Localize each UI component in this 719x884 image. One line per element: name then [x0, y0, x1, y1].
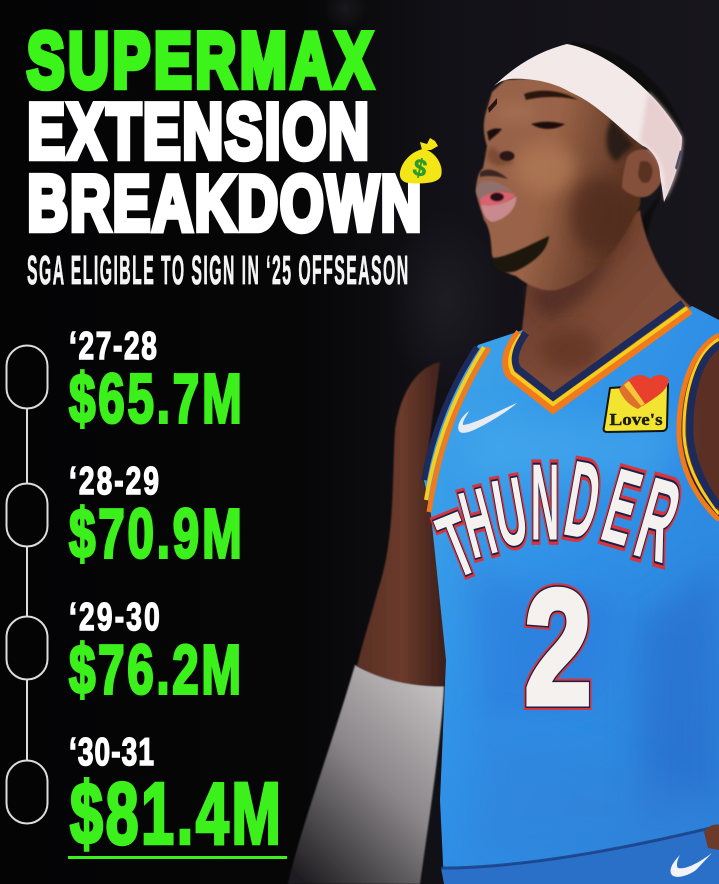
season 2030-31: ‘30-31 — [69, 731, 154, 774]
jersey wordmark THUNDER: E — [592, 446, 652, 569]
waistband and shorts — [441, 826, 719, 884]
left armhole trim — [429, 348, 489, 512]
jersey wordmark THUNDER: R — [624, 452, 693, 587]
jersey wordmark THUNDER: D — [557, 438, 609, 563]
neck — [505, 210, 692, 412]
mouth — [476, 181, 516, 222]
head — [476, 42, 684, 290]
jersey wordmark THUNDER: H — [450, 467, 506, 579]
highlight underline — [68, 856, 287, 859]
face — [476, 78, 645, 290]
jersey wordmark THUNDER: H — [450, 467, 506, 579]
timeline marker 3 — [6, 616, 48, 680]
jersey wordmark THUNDER — [426, 438, 693, 598]
left sleeve — [288, 665, 444, 884]
goatee — [492, 236, 549, 272]
title line: SUPERMAX: SUPERMAX — [27, 17, 373, 104]
jersey wordmark THUNDER: R — [624, 452, 693, 587]
season 2027-28: ‘27-28 — [69, 325, 157, 368]
eyes — [531, 122, 565, 129]
left arm — [357, 362, 448, 686]
nike swoosh on chest — [458, 403, 517, 433]
right armhole trim — [679, 335, 719, 520]
season 2027-28 — [69, 325, 242, 438]
loves patch: Love's — [610, 410, 663, 429]
jersey wordmark THUNDER: N — [531, 442, 559, 563]
season 2029-30 — [69, 596, 241, 709]
title line: BREAKDOWN: BREAKDOWN — [28, 160, 421, 247]
season 2028-29 — [69, 460, 242, 573]
timeline — [6, 346, 48, 824]
eyebrows — [524, 91, 578, 100]
jersey wordmark THUNDER: D — [557, 438, 609, 563]
jersey wordmark THUNDER: N — [531, 442, 559, 563]
title line: EXTENSION: EXTENSION — [28, 88, 369, 175]
jersey number 2: 2 — [524, 557, 592, 739]
jersey wordmark THUNDER: D — [557, 438, 609, 563]
shorts swoosh — [671, 853, 712, 877]
mustache — [480, 170, 508, 179]
jersey wordmark THUNDER: T — [426, 493, 489, 598]
jersey number 2: 2 — [524, 557, 592, 739]
headband — [492, 44, 682, 202]
ear — [622, 149, 664, 197]
jersey wordmark THUNDER: U — [485, 455, 535, 568]
loves patch — [604, 375, 669, 432]
jersey — [424, 303, 719, 884]
hair braid over headband — [570, 42, 684, 140]
jersey wordmark THUNDER: U — [485, 455, 535, 568]
jersey wordmark THUNDER: T — [426, 493, 489, 598]
timeline marker 4 — [6, 760, 48, 824]
season 2028-29: ‘28-29 — [69, 460, 159, 503]
cheek highlight — [515, 142, 575, 194]
jersey wordmark THUNDER: N — [531, 442, 559, 563]
subtitle: SGA ELIGIBLE TO SIGN IN ‘25 OFFSEASON — [27, 247, 408, 293]
player photo illustration — [288, 42, 719, 884]
icon: money bag: $ — [411, 154, 430, 183]
collar trim — [507, 310, 690, 409]
timeline marker 1 — [6, 346, 48, 408]
jersey wordmark THUNDER: H — [450, 467, 506, 579]
braid behind neck — [636, 190, 674, 302]
season 2029-30: ‘29-30 — [69, 596, 160, 639]
season 2029-30: $76.2M — [69, 630, 241, 709]
jersey wordmark THUNDER: E — [592, 446, 652, 569]
right arm — [682, 336, 719, 516]
season 2027-28: $65.7M — [69, 359, 242, 438]
timeline marker 2 — [6, 484, 48, 546]
jersey shading — [640, 560, 719, 830]
jersey wordmark THUNDER: T — [426, 493, 489, 598]
title — [27, 17, 421, 247]
season 2030-31: $81.4M — [70, 765, 281, 862]
jersey wordmark THUNDER: R — [624, 452, 693, 587]
jersey wordmark THUNDER: E — [592, 446, 652, 569]
sideburn — [606, 118, 634, 162]
season 2028-29: $70.9M — [69, 494, 242, 573]
connector line — [26, 409, 28, 760]
icon: money bag — [400, 138, 442, 183]
jersey wordmark THUNDER: U — [485, 455, 535, 568]
nose — [487, 146, 514, 166]
jersey number 2: 2 — [524, 557, 592, 739]
